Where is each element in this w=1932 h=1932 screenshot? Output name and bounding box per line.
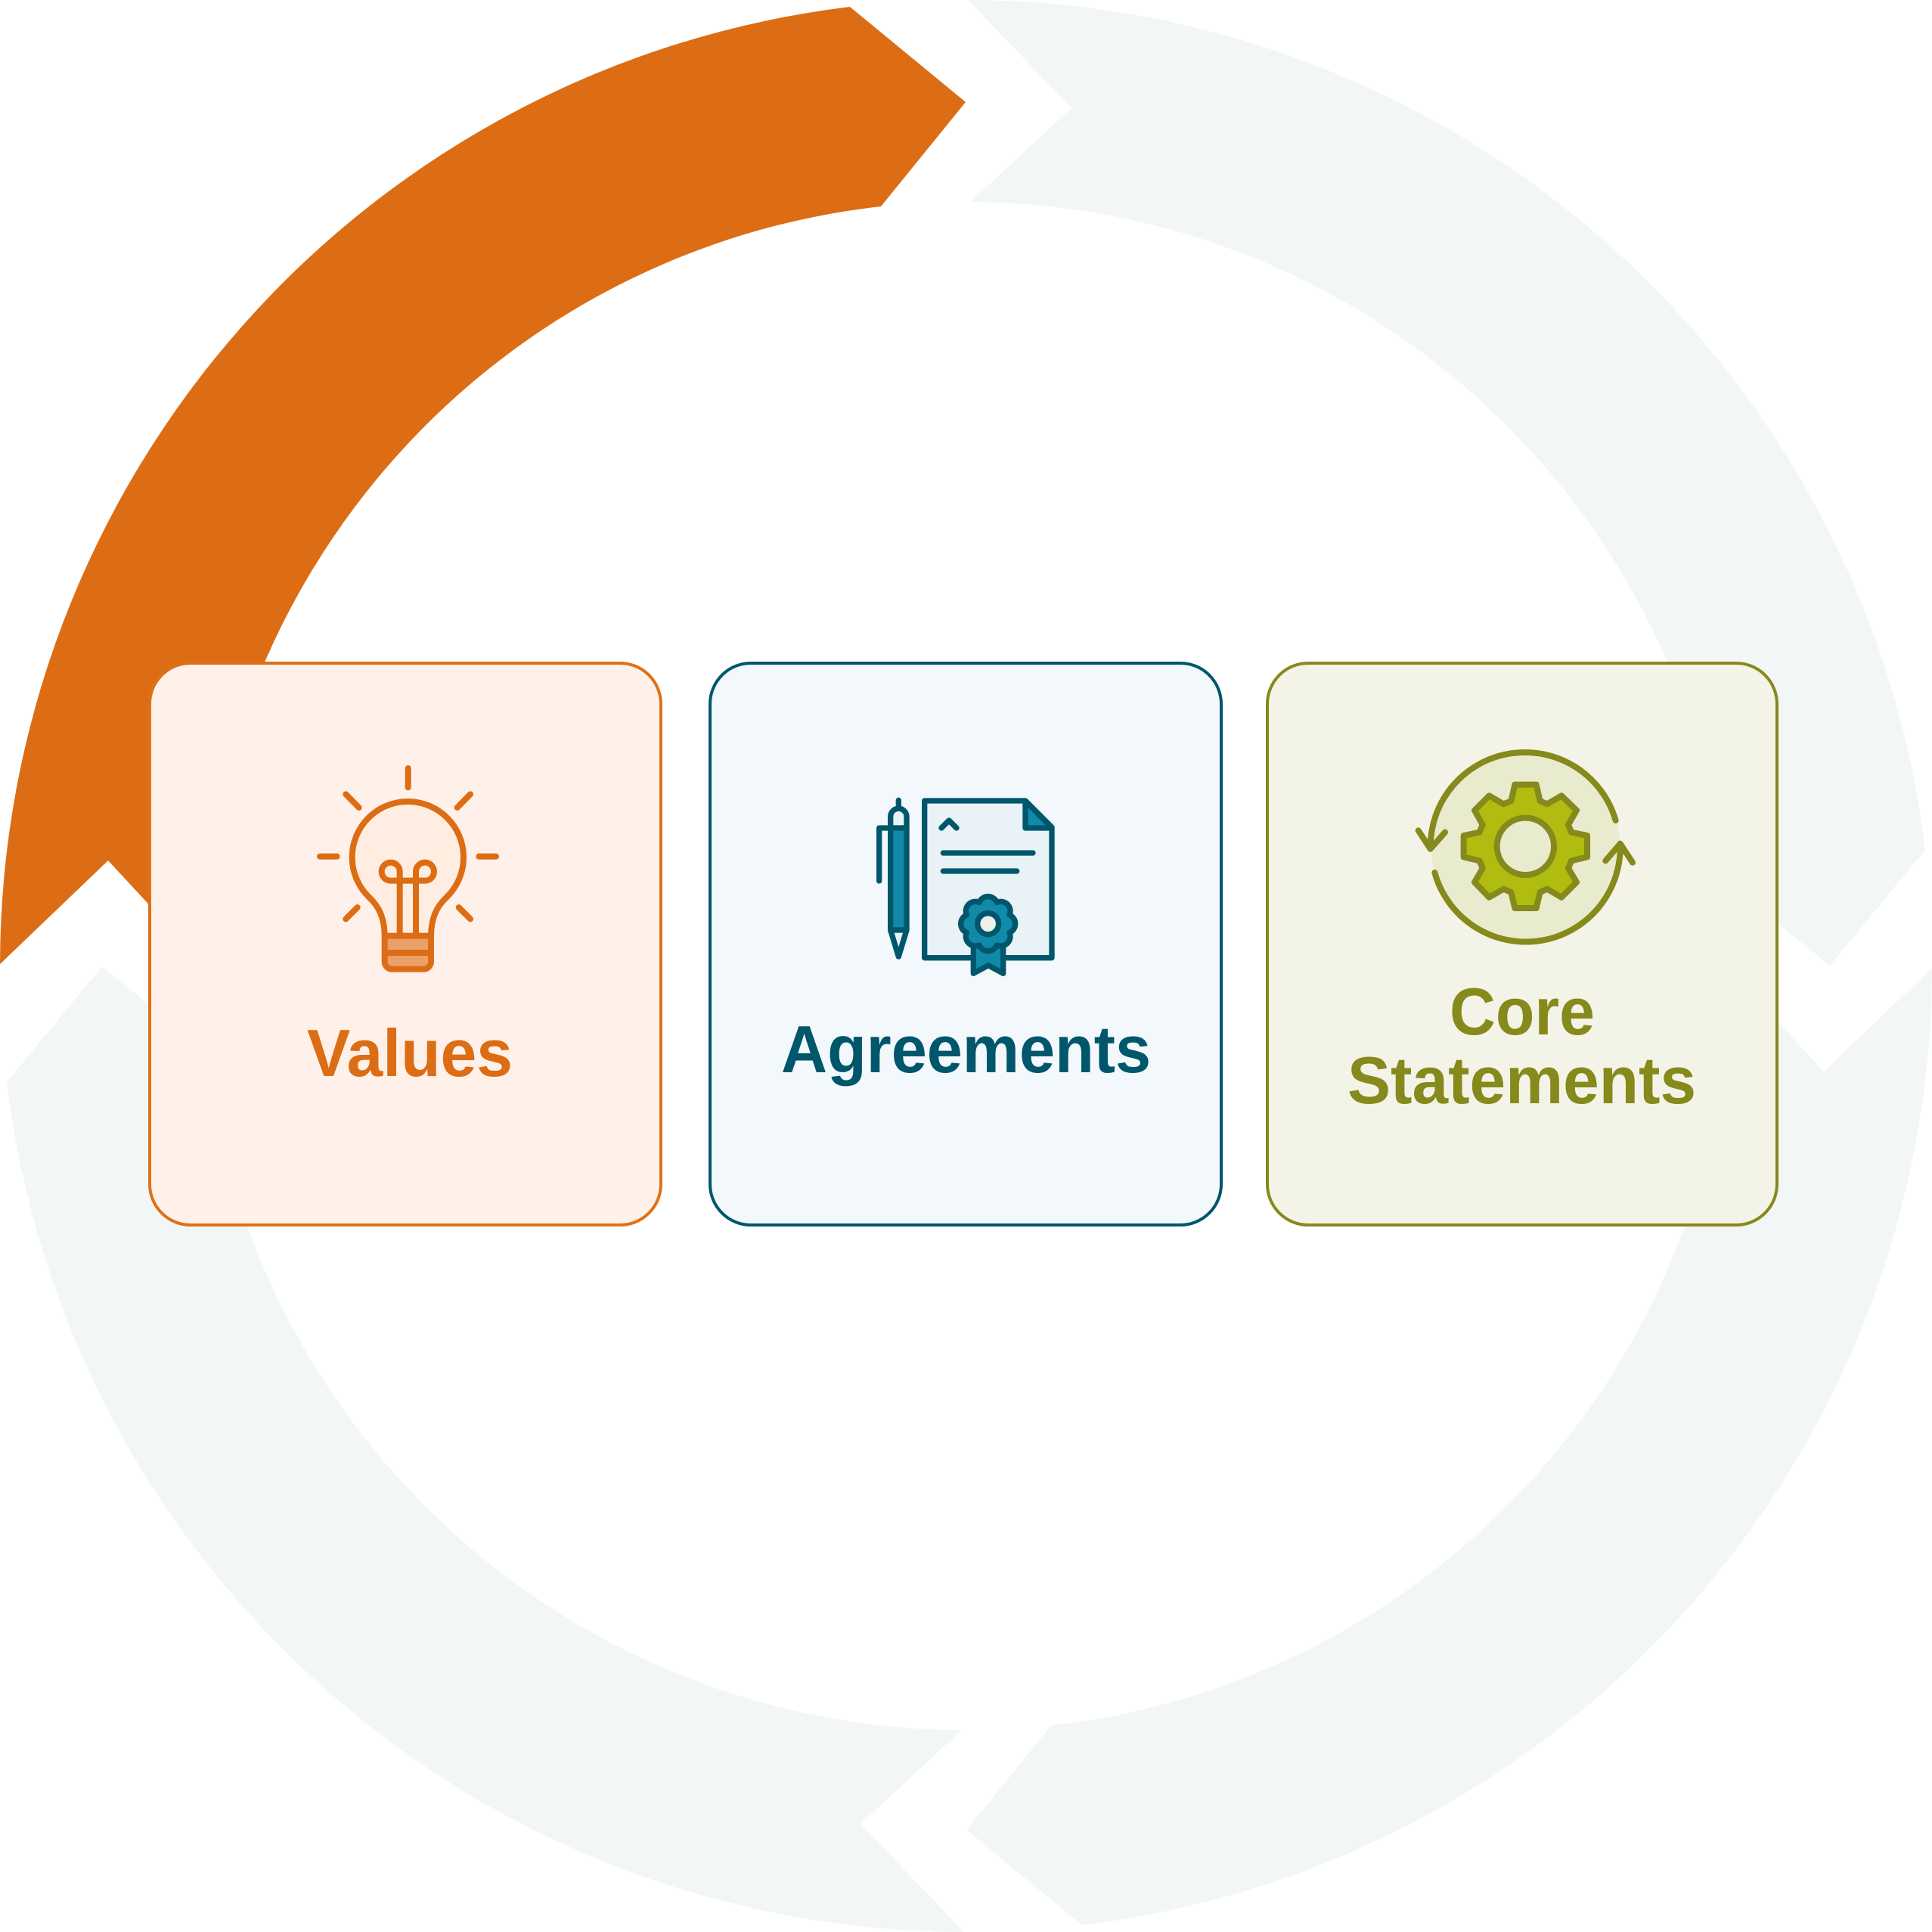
panel: core statements	[1267, 663, 1777, 1225]
icon: signed document and pen	[879, 800, 1052, 973]
panel: agreements	[710, 663, 1221, 1225]
values label: Values	[307, 1016, 513, 1090]
core statements card background	[1267, 663, 1777, 1225]
cycle arrow: top right (inactive)	[968, 0, 1925, 966]
icon: gear with cycle arrows	[1419, 752, 1633, 941]
agreements card background	[710, 663, 1221, 1225]
icon: light bulb	[320, 768, 496, 969]
core statements label	[1347, 974, 1696, 1118]
core statements label: Core	[1450, 974, 1595, 1049]
cycle arrow: bottom left (inactive)	[7, 966, 964, 1932]
panel: values	[150, 663, 661, 1225]
cycle arrow: bottom right (inactive)	[966, 968, 1932, 1925]
values card background	[150, 663, 661, 1225]
cycle arrow: top left (active, orange)	[0, 7, 966, 964]
agreements label: Agreements	[781, 1012, 1151, 1087]
core statements label: Statements	[1347, 1043, 1696, 1118]
